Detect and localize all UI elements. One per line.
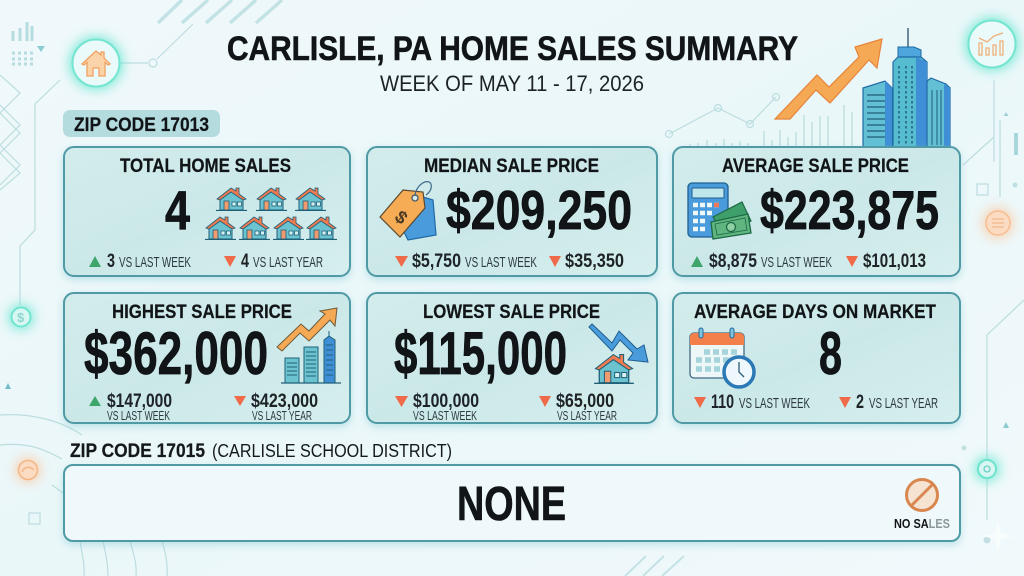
heading: zip code 17015: (CARLISLE SCHOOL DISTRICT)	[212, 440, 452, 461]
panel: average sale price	[673, 147, 960, 276]
icon: orange face badge	[16, 458, 40, 482]
stat: vs last year: 4	[241, 251, 249, 272]
stat: vs last week: 110	[711, 392, 734, 413]
stat: vs last year	[539, 391, 617, 423]
stat: vs last week: VS LAST WEEK	[465, 254, 537, 271]
stat: vs last week: VS LAST WEEK	[739, 395, 810, 412]
stat: vs last week	[395, 391, 479, 423]
stat: vs last year: VS LAST YEAR	[253, 254, 323, 271]
value: $223,875	[760, 179, 939, 241]
stat: vs last week	[694, 392, 810, 413]
heading: MEDIAN SALE PRICE	[424, 155, 599, 177]
stat: vs last week	[395, 251, 537, 272]
stat: vs last year	[846, 251, 926, 272]
illustration: skyline and rising arrow	[775, 28, 950, 147]
stat: vs last year: $35,350	[565, 251, 624, 272]
value: NONE	[457, 478, 566, 531]
value: 4	[165, 179, 190, 241]
value: $362,000	[84, 320, 268, 387]
icon: calendar and clock	[690, 328, 754, 387]
stat: vs last year: VS LAST YEAR	[252, 408, 312, 423]
icon: calculator and cash	[688, 183, 751, 239]
stat: vs last year	[549, 251, 624, 272]
icon: dollar badge: $	[17, 310, 25, 325]
panel: total home sales	[64, 147, 350, 276]
heading: zip code 17015	[70, 439, 452, 461]
subtitle: WEEK OF MAY 11 - 17, 2026	[380, 71, 644, 96]
value: $209,250	[446, 179, 632, 241]
icon: falling arrow and house	[589, 324, 648, 383]
stat: vs last week: VS LAST WEEK	[761, 254, 832, 271]
icon: orange coin badge	[983, 208, 1013, 238]
stat: vs last year	[234, 391, 318, 423]
stat: vs last week: $147,000	[107, 391, 172, 412]
stat: vs last week	[691, 251, 832, 272]
heading: HIGHEST SALE PRICE	[112, 301, 292, 323]
stat: vs last week: VS LAST WEEK	[119, 254, 191, 271]
icon: price tags	[380, 182, 436, 240]
icon: houses	[205, 188, 337, 240]
heading: TOTAL HOME SALES	[120, 155, 291, 177]
icon: price tags: $	[391, 206, 412, 228]
stat: vs last year: $423,000	[251, 391, 318, 412]
panel: highest sale price	[64, 293, 350, 423]
panel: zip code 17015 result	[64, 465, 960, 541]
stat: vs last week: 3	[107, 251, 115, 272]
stat: vs last year	[839, 392, 938, 413]
stat: vs last year	[224, 251, 323, 272]
stat: vs last week: VS LAST WEEK	[413, 408, 477, 423]
no sales label: NO SALES	[894, 516, 950, 531]
stat: vs last year: 2	[856, 392, 864, 413]
panel: median sale price	[367, 147, 657, 276]
icon: dollar badge	[9, 305, 33, 329]
panel: lowest sale price	[367, 293, 657, 423]
stat: vs last week	[89, 391, 172, 423]
heading: AVERAGE DAYS ON MARKET	[694, 301, 936, 323]
stat: vs last week	[89, 251, 191, 272]
icon: home badge	[70, 37, 122, 89]
stat: vs last week: VS LAST WEEK	[107, 408, 170, 423]
icon: target badge	[975, 457, 999, 481]
value: $115,000	[394, 320, 567, 387]
panel: average days on market	[673, 293, 960, 423]
stat: vs last year: $101,013	[863, 251, 926, 272]
stat: vs last week: $8,875	[709, 251, 757, 272]
icon: chart badge	[966, 18, 1018, 70]
heading: zip code 17015: ZIP CODE 17015	[70, 439, 205, 461]
heading: LOWEST SALE PRICE	[423, 301, 600, 323]
zip code 17013 label: ZIP CODE 17013	[74, 114, 209, 136]
stat: vs last year: $65,000	[556, 391, 614, 412]
stat: vs last week: $5,750	[412, 251, 461, 272]
heading: AVERAGE SALE PRICE	[722, 155, 909, 177]
stat: vs last week: $100,000	[413, 391, 479, 412]
icon: no sales	[906, 480, 938, 510]
stat: vs last year: VS LAST YEAR	[869, 395, 938, 412]
stat: vs last year: VS LAST YEAR	[557, 408, 617, 423]
icon: buildings and arrow	[277, 308, 341, 383]
title: CARLISLE, PA HOME SALES SUMMARY	[227, 29, 798, 67]
value: 8	[819, 320, 842, 387]
